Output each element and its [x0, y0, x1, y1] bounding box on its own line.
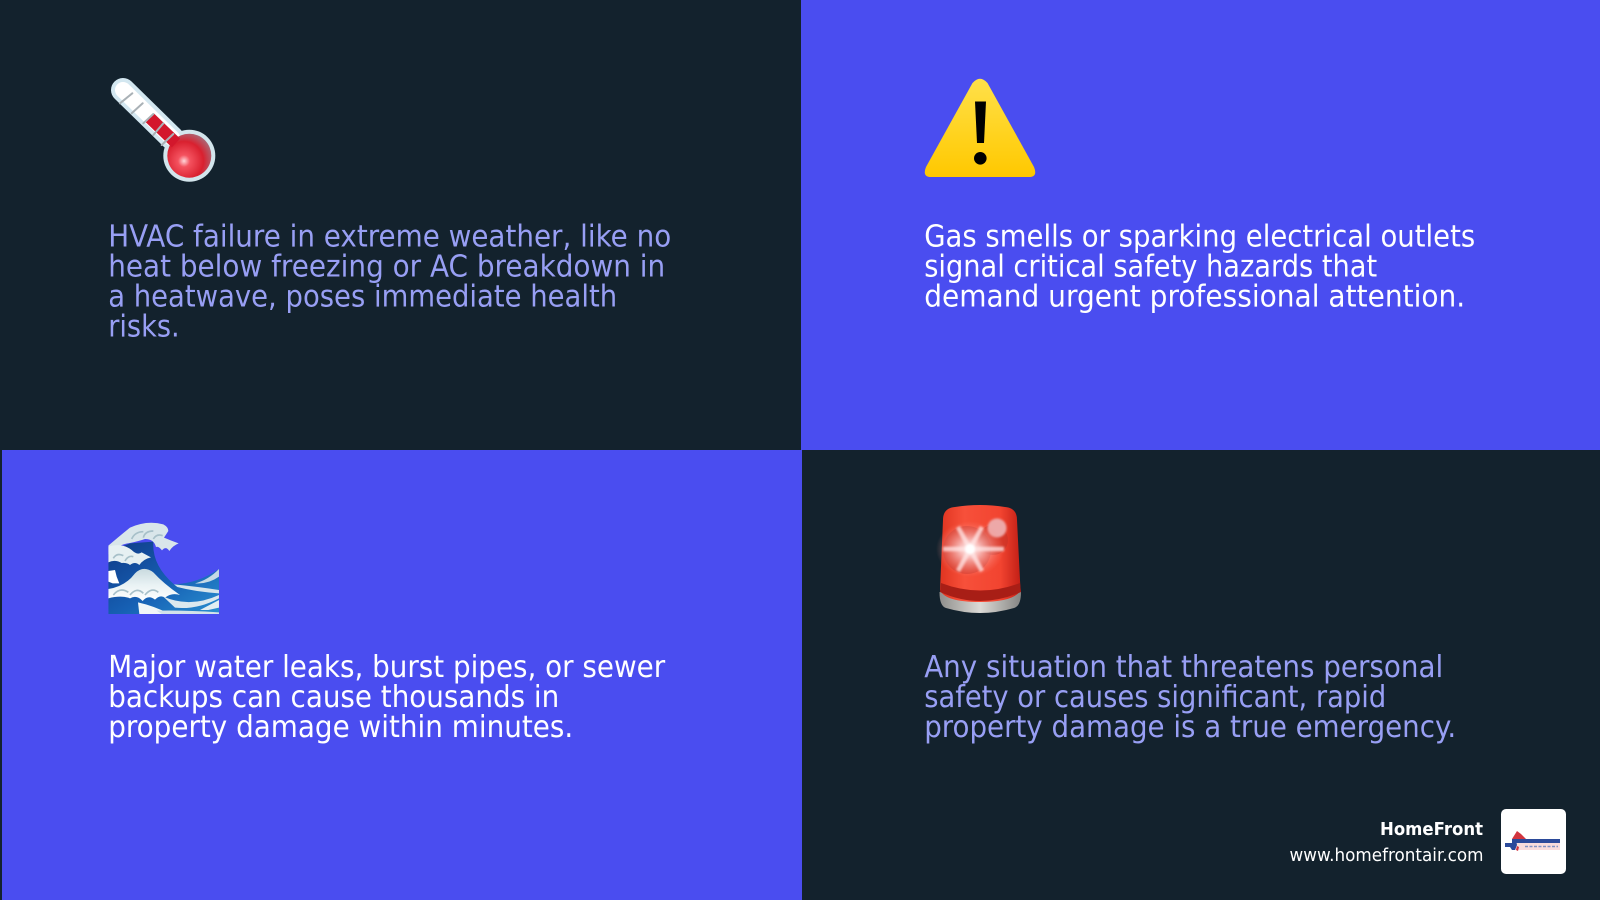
text: HVAC failure: a heatwave, poses immediate health	[108, 279, 617, 314]
icon: thermometer	[120, 90, 215, 182]
text: water leaks: property damage within minutes.	[108, 710, 573, 745]
text: any situation: Any situation that threatens personal	[924, 650, 1443, 685]
text: water leaks: backups can cause thousands in	[108, 680, 559, 715]
icon: red siren	[936, 505, 1021, 613]
text: water leaks	[108, 650, 666, 745]
logo card	[1501, 809, 1566, 874]
panel: true emergency	[802, 450, 1600, 900]
text: water leaks: Major water leaks, burst pipes, or sewer	[108, 650, 666, 685]
text: gas smells	[924, 219, 1475, 314]
text: gas smells: signal critical safety hazards that	[924, 249, 1377, 284]
text: any situation: property damage is a true emergency.	[924, 710, 1456, 745]
icon: ocean wave	[108, 523, 219, 614]
icon: warning sign	[925, 79, 1035, 177]
text: any situation	[924, 650, 1456, 745]
panel: gas and electrical hazards	[801, 0, 1600, 450]
text: HVAC failure: risks.	[108, 309, 180, 344]
panel: water damage	[2, 450, 802, 900]
panel: extreme weather HVAC failure	[2, 0, 801, 450]
text: HVAC failure	[108, 219, 671, 344]
text: HVAC failure: heat below freezing or AC breakdown in	[108, 249, 665, 284]
footer: brand	[1290, 809, 1566, 874]
text: gas smells: Gas smells or sparking electrical outlets	[924, 219, 1475, 254]
text: HVAC failure: HVAC failure in extreme weather, like no	[108, 219, 671, 254]
text: gas smells: demand urgent professional attention.	[924, 279, 1465, 314]
text: website url: www.homefrontair.com	[1290, 846, 1484, 866]
text: brand name: HomeFront	[1380, 819, 1483, 840]
text: any situation: safety or causes significant, rapid	[924, 680, 1386, 715]
